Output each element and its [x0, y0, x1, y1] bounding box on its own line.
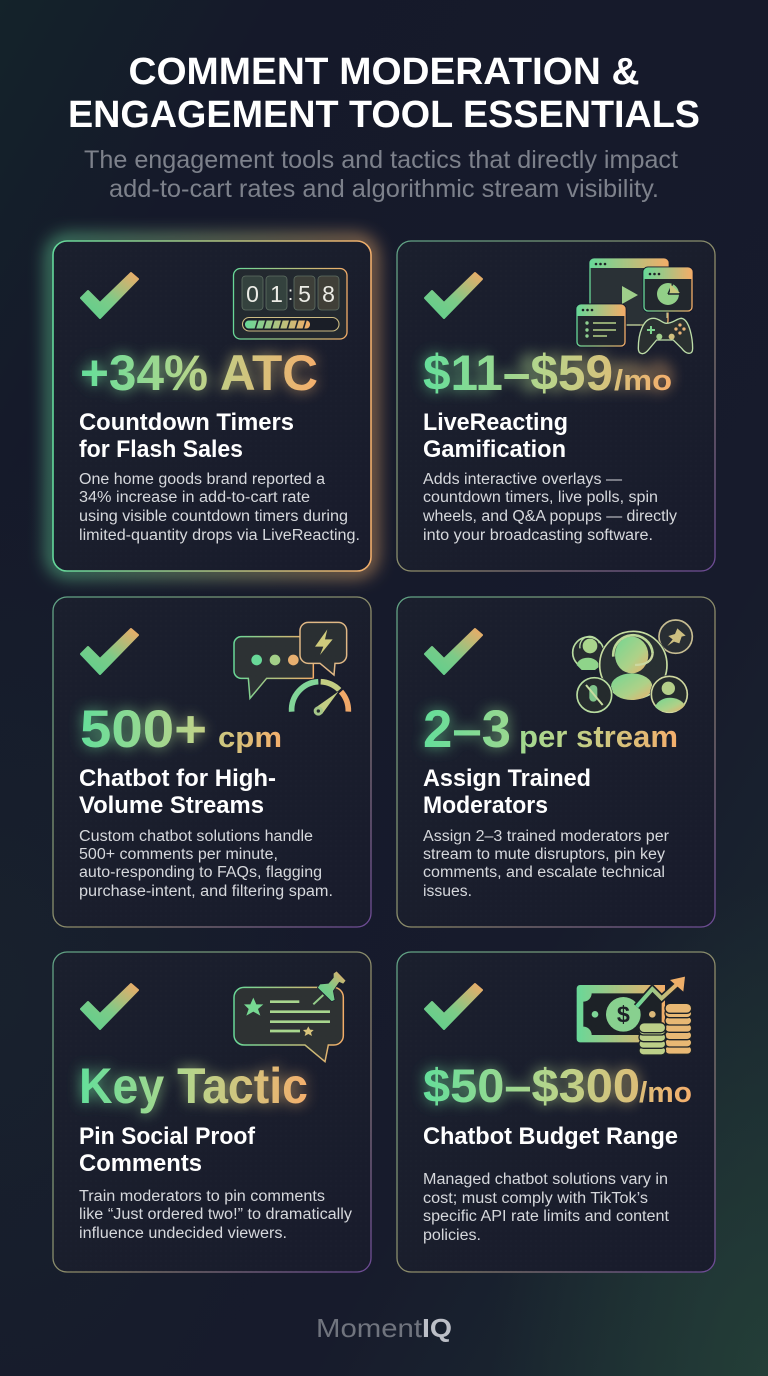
body text — [79, 828, 333, 900]
logo: MomentIQ — [316, 1313, 452, 1343]
heading: Moderators — [423, 792, 548, 819]
subtitle: The engagement tools and tactics that directly impact — [84, 146, 678, 174]
heading: for Flash Sales — [79, 436, 243, 463]
heading: Volume Streams — [79, 792, 264, 819]
body text: purchase-intent, and filtering spam. — [79, 883, 333, 900]
icon: check mark — [425, 629, 482, 674]
heading: Gamification — [423, 436, 566, 463]
body text — [79, 471, 360, 544]
heading — [423, 765, 591, 819]
body text: issues. — [423, 883, 472, 900]
statistic: per stream — [519, 719, 678, 754]
icon: check mark — [81, 984, 138, 1029]
body text: comments, and escalate technical — [423, 864, 665, 881]
statistic: $50–$300 — [423, 1059, 640, 1112]
icon: countdown timer: 5 — [298, 281, 311, 307]
body text: 34% increase in add-to-cart rate — [79, 489, 310, 506]
body text: auto-responding to FAQs, flagging — [79, 864, 322, 881]
icon: pinned comment — [234, 971, 346, 1062]
body text: specific API rate limits and content — [423, 1208, 670, 1225]
icon: countdown timer: : — [288, 284, 293, 305]
body text: influence undecided viewers. — [79, 1225, 287, 1242]
statistic: Key Tactic — [79, 1058, 308, 1114]
icon: check mark — [425, 984, 482, 1029]
statistic: Key Tactic — [79, 1058, 308, 1114]
body text: like “Just ordered two!” to dramatically — [79, 1206, 352, 1223]
panel: LiveReacting gamification — [397, 241, 715, 571]
body text: Custom chatbot solutions handle — [79, 828, 313, 845]
body text: Adds interactive overlays — — [423, 471, 623, 488]
statistic: $50–$300 — [423, 1059, 640, 1112]
body text: cost; must comply with TikTok’s — [423, 1190, 648, 1207]
statistic: 2–3 — [423, 700, 511, 759]
statistic — [80, 700, 282, 759]
icon: moderator team — [573, 620, 692, 714]
body text: Managed chatbot solutions vary in — [423, 1171, 668, 1188]
heading: Assign Trained — [423, 765, 591, 792]
body text — [423, 828, 669, 900]
heading: Pin Social Proof — [79, 1123, 256, 1150]
body text — [423, 1171, 670, 1244]
heading: Countdown Timers — [79, 409, 294, 436]
body text: Train moderators to pin comments — [79, 1188, 325, 1205]
icon: overlay windows and gamepad — [577, 259, 693, 354]
heading — [423, 409, 568, 463]
body text: limited-quantity drops via LiveReacting. — [79, 527, 360, 544]
icon: money and coins — [577, 977, 692, 1055]
logo: MomentIQ: Moment — [316, 1313, 423, 1343]
heading: Chatbot Budget Range — [423, 1123, 678, 1150]
panel: trained moderators — [397, 597, 715, 927]
statistic: $11–$59/mo — [423, 345, 672, 401]
body text: using visible countdown timers during — [79, 508, 348, 525]
statistic: cpm — [218, 722, 282, 754]
statistic: $11–$59 — [423, 345, 613, 401]
title: ENGAGEMENT TOOL ESSENTIALS — [68, 94, 700, 136]
body text: policies. — [423, 1227, 481, 1244]
title: COMMENT MODERATION & — [128, 51, 640, 93]
statistic: /mo — [614, 365, 672, 397]
statistic: /mo — [639, 1077, 692, 1109]
heading — [79, 765, 276, 819]
panel: chatbot budget range — [397, 952, 715, 1272]
heading — [79, 1123, 256, 1177]
body text — [79, 1188, 352, 1242]
icon: check mark — [425, 273, 482, 318]
body text: into your broadcasting software. — [423, 527, 653, 544]
body text: stream to mute disruptors, pin key — [423, 846, 665, 863]
statistic — [423, 700, 678, 759]
icon: money and coins: $ — [617, 1002, 630, 1028]
body text: Assign 2–3 trained moderators per — [423, 828, 669, 845]
subtitle — [84, 146, 678, 203]
statistic: +34% ATC — [80, 345, 318, 401]
title — [68, 51, 700, 136]
statistic: +34% ATC — [80, 345, 318, 401]
heading: Comments — [79, 1150, 202, 1177]
logo: MomentIQ: IQ — [422, 1313, 452, 1343]
icon: countdown timer: 8 — [322, 281, 335, 307]
body text: One home goods brand reported a — [79, 471, 325, 488]
body text: 500+ comments per minute, — [79, 846, 278, 863]
statistic: 500+ — [80, 700, 207, 759]
subtitle: add-to-cart rates and algorithmic stream visibility. — [109, 175, 659, 203]
statistic: 2–3 — [423, 700, 511, 759]
panel: pin social proof — [53, 952, 371, 1272]
heading: LiveReacting — [423, 409, 568, 436]
body text: wheels, and Q&A popups — directly — [422, 508, 677, 525]
icon: chat bubbles and gauge — [234, 622, 348, 716]
icon: countdown timer: 1 — [270, 281, 283, 307]
icon: check mark — [81, 273, 138, 318]
body text — [422, 471, 677, 544]
statistic: 500+ — [80, 700, 207, 759]
icon: countdown timer: 0 — [246, 281, 259, 307]
panel: countdown timers — [53, 241, 371, 571]
icon: countdown timer — [234, 268, 347, 339]
panel: chatbot high-volume — [53, 597, 371, 927]
heading — [79, 409, 294, 463]
heading: Chatbot for High- — [79, 765, 276, 792]
body text: countdown timers, live polls, spin — [423, 489, 658, 506]
icon: check mark — [81, 629, 138, 674]
